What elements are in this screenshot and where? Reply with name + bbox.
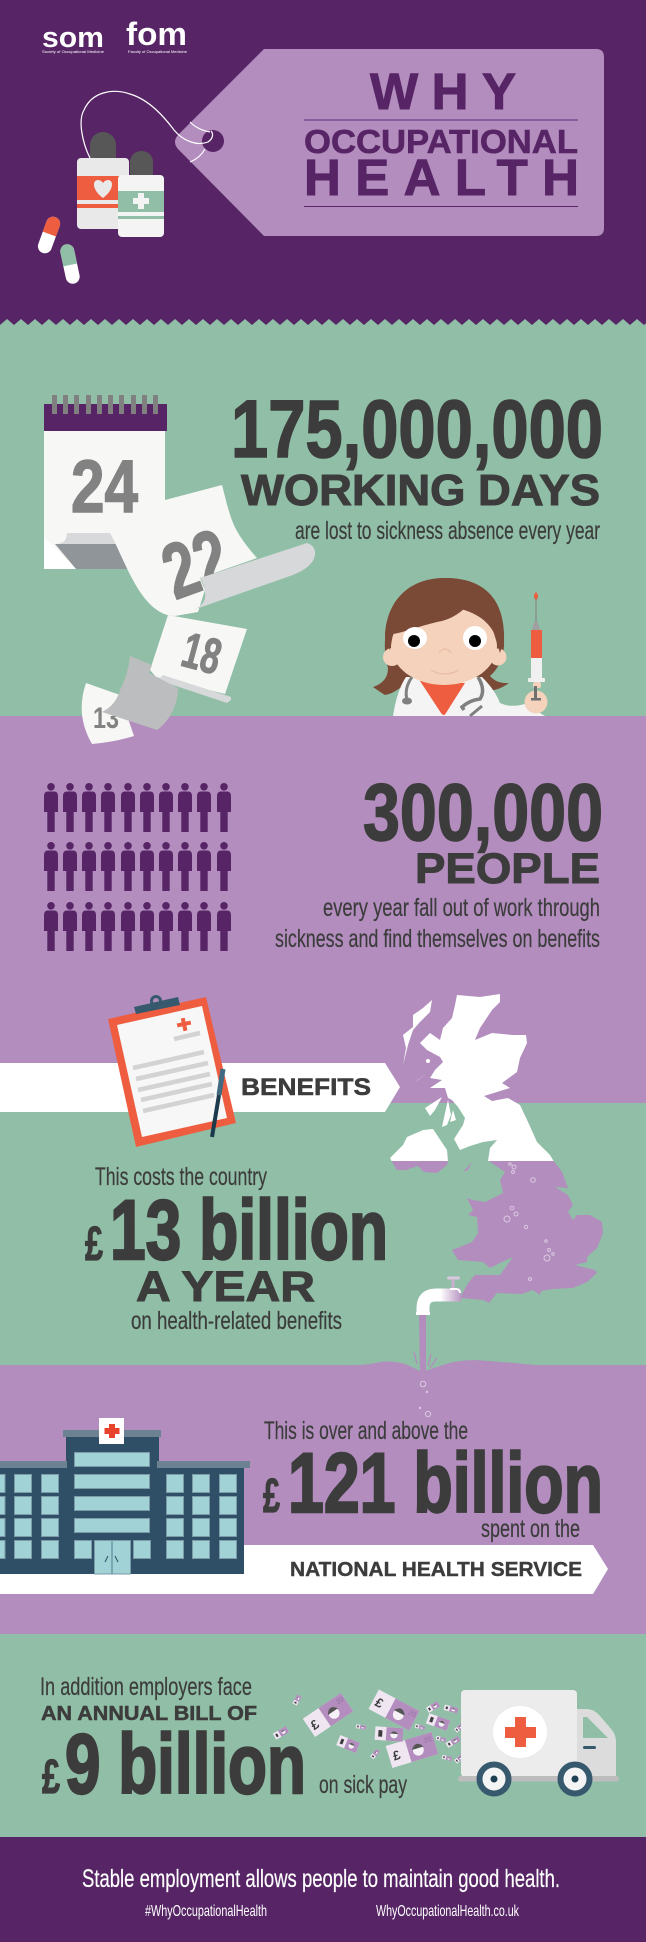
icon: clipboard [108, 996, 236, 1147]
map: United Kingdom [390, 994, 603, 1303]
heading: £13 billion: £ [85, 1218, 103, 1271]
heading: £13 billion: 13 billion [110, 1183, 388, 1277]
panel: sick pay background [0, 1634, 646, 1837]
large banknote [303, 1693, 353, 1737]
panel: working days background [0, 319, 646, 716]
icon: green capsule [59, 243, 81, 285]
calendar pad 24 [44, 395, 167, 569]
heading: £9 billion: 9 billion [65, 1717, 306, 1811]
text: over and above: This is over and above the [264, 1417, 468, 1445]
panel: footer background [0, 1837, 646, 1942]
calendar page 18: 18 [176, 622, 227, 685]
large banknote [386, 1732, 438, 1768]
large banknote: 20 [407, 1710, 417, 1719]
icon: flying banknotes [273, 1689, 464, 1768]
banner: NATIONAL HEALTH SERVICE [0, 1545, 608, 1594]
panel: benefits background [0, 1103, 646, 1383]
rear wheel [560, 1764, 590, 1794]
logo: SOM: som [42, 22, 104, 54]
pictogram: 30 people [44, 783, 231, 951]
text: in addition employers face: In addition employers face [40, 1673, 252, 1701]
calendar pad 24: 24 [71, 445, 138, 528]
text: costs the country: This costs the country [95, 1163, 267, 1191]
banner: BENEFITS [0, 1063, 400, 1112]
icon: falling calendar [44, 395, 315, 744]
bubbles inside England [504, 1163, 554, 1280]
footer website: WhyOccupationalHealth.co.uk [376, 1903, 520, 1920]
calendar page 18 [150, 615, 247, 703]
icon: hospital [0, 1418, 250, 1574]
large banknote: 20 [335, 1696, 346, 1706]
banner: NATIONAL HEALTH SERVICE: NATIONAL HEALTH SERVICE [290, 1558, 582, 1581]
heading: PEOPLE: PEOPLE [415, 845, 600, 893]
logo: FOM: fom [126, 16, 187, 52]
banner: BENEFITS: BENEFITS [241, 1074, 371, 1101]
large banknote: £ [308, 1716, 323, 1733]
large banknote: £ [373, 1694, 387, 1711]
calendar page 22: 22 [151, 511, 241, 616]
hospital sign [99, 1418, 124, 1444]
syringe [524, 592, 548, 714]
heading: £9 billion: £ [42, 1751, 60, 1804]
panel: people background [0, 716, 646, 1103]
heading: £121 billion: £ [263, 1470, 280, 1523]
title: WHY: WHY [370, 63, 516, 120]
footer hashtag: #WhyOccupationalHealth [145, 1903, 267, 1920]
panel: header background [0, 0, 646, 325]
calendar page 13 [82, 683, 134, 744]
text: on sick pay: on sick pay [319, 1771, 407, 1799]
luggage tag title [175, 49, 604, 236]
text: health-related benefits: on health-related benefits [131, 1307, 342, 1335]
icon: doctor with syringe [373, 578, 548, 716]
text: fall out of work [275, 894, 600, 953]
calendar page 13: 13 [93, 702, 119, 735]
large banknote: £ [391, 1747, 403, 1763]
title: OCCUPATIONAL: OCCUPATIONAL [304, 123, 578, 160]
logo: FOM: Faculty of Occupational Medicine [128, 49, 188, 54]
logo: SOM: Society of Occupational Medicine [42, 49, 105, 54]
heading: an annual bill of: AN ANNUAL BILL OF [41, 1703, 257, 1725]
panel: NHS background [0, 1360, 646, 1634]
front wheel [480, 1764, 508, 1794]
calendar page 22 [110, 485, 315, 616]
heading: A YEAR: A YEAR [136, 1263, 315, 1311]
icon: tap with running water [414, 1276, 461, 1417]
icon: medicine bottles and string [77, 91, 213, 237]
large banknote [369, 1689, 419, 1731]
icon: orange capsule [36, 215, 62, 255]
heading: WORKING DAYS: WORKING DAYS [241, 466, 600, 515]
text: spent on the: spent on the [481, 1515, 580, 1543]
large banknote: 20 [423, 1736, 433, 1745]
title: HEALTH: HEALTH [304, 149, 579, 206]
icon: ambulance van [458, 1690, 619, 1794]
